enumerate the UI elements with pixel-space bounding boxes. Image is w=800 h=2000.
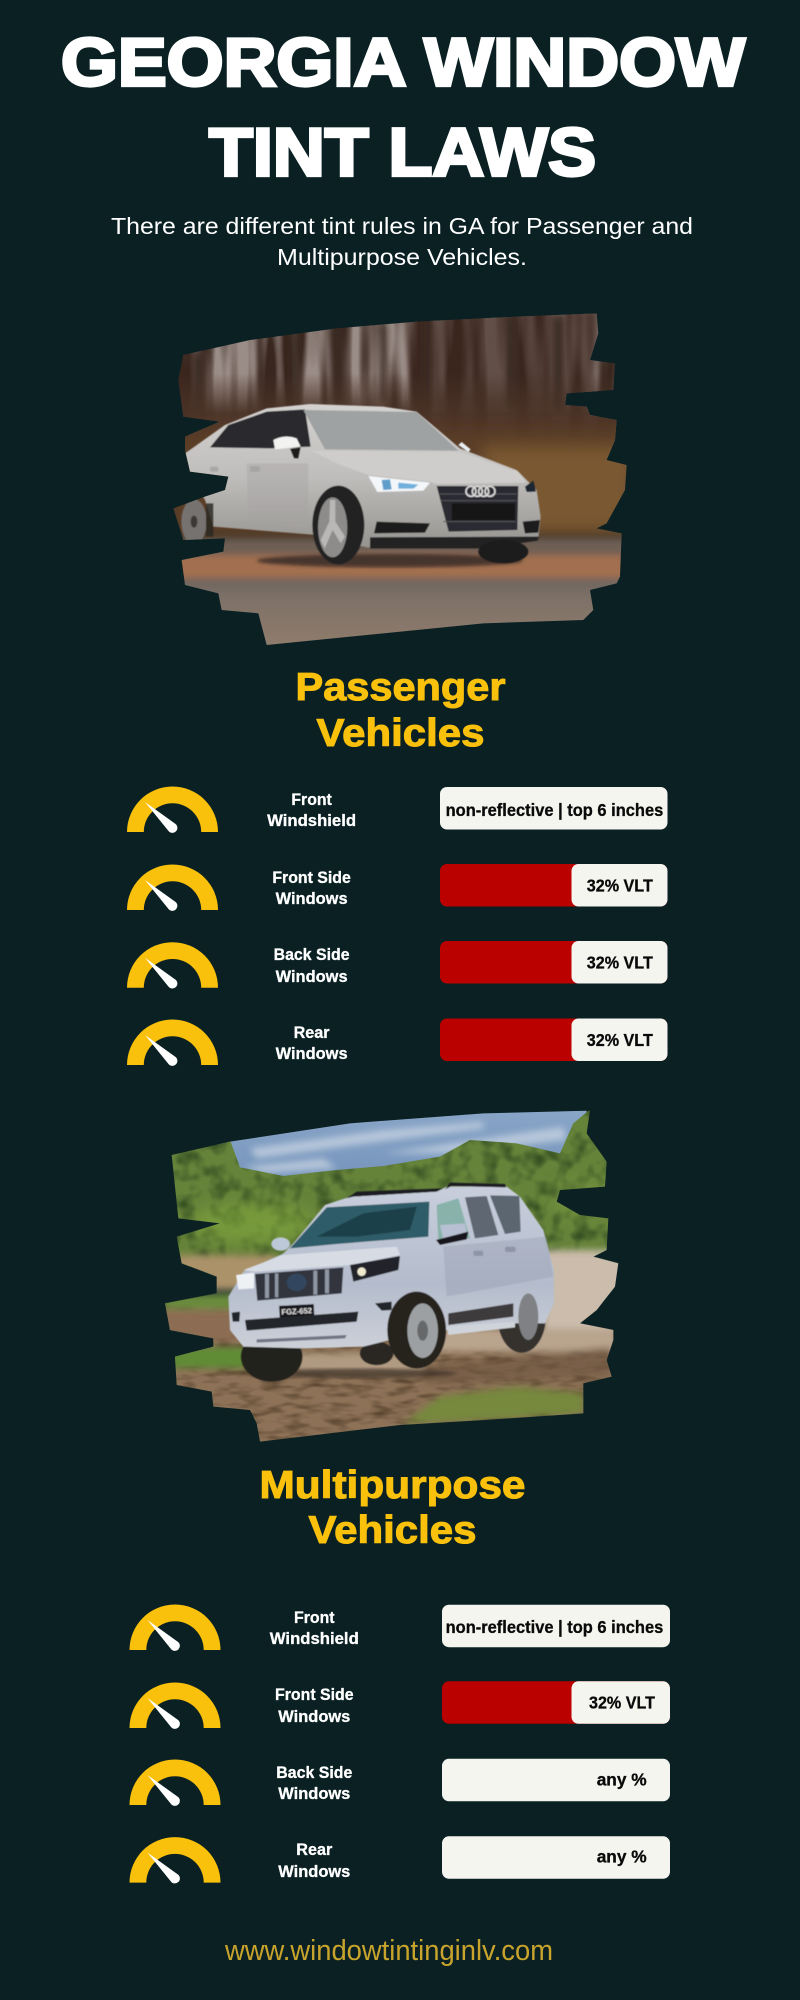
heading: passenger vehicles: Vehicles	[316, 712, 484, 755]
title: GEORGIA WINDOW	[61, 24, 746, 100]
label: front side windows: Windows	[278, 1708, 350, 1726]
value bar: any %	[442, 1836, 670, 1879]
icon: gauge	[130, 1682, 220, 1729]
value bar: 32% VLT: 32% VLT	[587, 952, 653, 972]
subtitle: There are different tint rules in GA for Passenger and	[111, 213, 693, 239]
photo: silver sedan in brush stroke mask	[174, 314, 627, 645]
value bar: non-reflective	[442, 1605, 670, 1647]
label: front side windows	[275, 1686, 354, 1726]
photo: silver SUV in brush stroke mask	[160, 1107, 627, 1453]
value bar: 32% VLT	[440, 941, 668, 984]
label: front windshield: Windshield	[267, 812, 356, 830]
panel: multipurpose vehicles	[130, 1464, 670, 1883]
label: front side windows	[272, 869, 351, 908]
value bar: any %: any %	[597, 1846, 647, 1866]
label: rear windows	[278, 1841, 350, 1881]
label: rear windows	[276, 1024, 348, 1063]
label: rear windows: Rear	[296, 1841, 333, 1859]
heading: multipurpose vehicles	[260, 1464, 526, 1552]
value bar: any %: any %	[597, 1770, 647, 1790]
value bar: non-reflective: non-reflective | top 6 inches	[446, 1617, 664, 1637]
footer url: www.windowtintinginlv.com	[224, 1935, 553, 1967]
label: front windshield: Front	[294, 1609, 335, 1627]
value bar: any %	[442, 1759, 670, 1801]
icon: gauge	[127, 942, 218, 989]
icon: gauge	[130, 1604, 220, 1651]
value bar: 32% VLT: 32% VLT	[589, 1692, 655, 1712]
icon: gauge	[127, 1020, 218, 1066]
value bar: 32% VLT	[442, 1681, 670, 1724]
heading: multipurpose vehicles: Vehicles	[308, 1509, 476, 1552]
label: front side windows: Front Side	[275, 1686, 354, 1704]
heading: passenger vehicles: Passenger	[296, 666, 506, 709]
icon: gauge	[127, 864, 218, 911]
label: back side windows: Windows	[278, 1785, 350, 1803]
heading: multipurpose vehicles: Multipurpose	[260, 1464, 526, 1507]
label: back side windows	[274, 946, 350, 986]
label: back side windows	[276, 1764, 352, 1803]
title	[61, 24, 746, 190]
label: back side windows: Back Side	[276, 1764, 352, 1782]
icon: gauge	[130, 1837, 220, 1883]
label: front windshield	[270, 1609, 359, 1648]
title: TINT LAWS	[209, 114, 596, 190]
value bar: 32% VLT: 32% VLT	[587, 876, 653, 896]
label: front side windows: Windows	[276, 890, 348, 908]
heading: passenger vehicles	[296, 666, 506, 755]
label: front windshield: Front	[291, 791, 332, 809]
photo: silver SUV in brush stroke mask: FGZ-652	[281, 1306, 313, 1317]
label: rear windows: Windows	[278, 1863, 350, 1881]
panel: passenger vehicles	[127, 666, 668, 1066]
value bar: 32% VLT	[440, 1018, 668, 1061]
subtitle	[111, 213, 693, 270]
label: front side windows: Front Side	[272, 869, 351, 887]
subtitle: Multipurpose Vehicles.	[277, 244, 527, 270]
shadow beneath the car	[257, 554, 523, 567]
label: rear windows: Rear	[294, 1024, 330, 1042]
label: front windshield: Windshield	[270, 1630, 359, 1648]
value bar: non-reflective	[440, 787, 668, 830]
value bar: 32% VLT	[440, 864, 668, 906]
value bar: 32% VLT: 32% VLT	[587, 1030, 653, 1050]
value bar: non-reflective: non-reflective | top 6 inches	[446, 800, 664, 820]
icon: gauge	[127, 786, 218, 833]
shadow beneath the SUV	[257, 1369, 457, 1378]
label: rear windows: Windows	[276, 1045, 348, 1063]
label: back side windows: Windows	[276, 968, 348, 986]
icon: gauge	[130, 1760, 220, 1806]
label: back side windows: Back Side	[274, 946, 350, 964]
label: front windshield	[267, 791, 356, 830]
